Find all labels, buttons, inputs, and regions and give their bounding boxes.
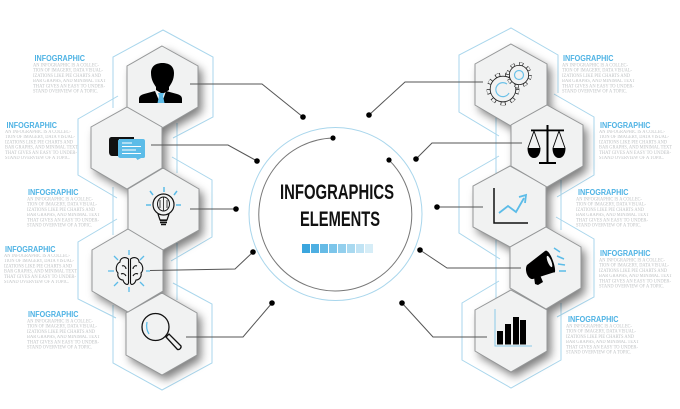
text block: right 3 xyxy=(576,188,649,228)
title xyxy=(280,181,394,231)
text block: left 3: TION OF IMAGERY, DATA VISUAL- xyxy=(27,203,97,208)
text block: left 4: AN INFOGRAPHIC IS A COLLEC- xyxy=(4,254,70,259)
icon: line chart xyxy=(494,188,528,223)
title: ELEMENTS xyxy=(300,208,380,231)
text block: left 3 xyxy=(27,188,100,228)
text block: right 1: BAR GRAPHS, AND MINIMAL TEXT xyxy=(562,79,635,84)
text block: right 3: THAT GIVES AN EASY TO UNDER- xyxy=(576,218,648,223)
text block: right 2: STAND OVERVIEW OF A TOPIC. xyxy=(599,156,664,161)
text block: left 1: INFOGRAPHIC xyxy=(34,54,85,63)
right hexagon 1 xyxy=(475,44,547,126)
text block: right 3: AN INFOGRAPHIC IS A COLLEC- xyxy=(576,198,642,202)
icon: brain xyxy=(108,250,150,292)
text block: right 5: AN INFOGRAPHIC IS A COLLEC- xyxy=(566,324,632,330)
icon: bar chart xyxy=(495,309,532,346)
right hexagon 2 xyxy=(511,105,583,187)
text block: left 3: STAND OVERVIEW OF A TOPIC. xyxy=(27,224,92,228)
text block: right 2: THAT GIVES AN EASY TO UNDER- xyxy=(599,151,671,156)
gradient squares xyxy=(302,244,373,253)
text block: left 3: THAT GIVES AN EASY TO UNDER- xyxy=(27,218,99,223)
icon: light bulb xyxy=(146,187,181,224)
text block: right 5: THAT GIVES AN EASY TO UNDER- xyxy=(566,345,638,350)
text block: left 5: THAT GIVES AN EASY TO UNDER- xyxy=(27,340,99,345)
text block: right 4: INFOGRAPHIC xyxy=(600,249,651,258)
text block: right 2: IZATIONS LIKE PIE CHARTS AND xyxy=(599,140,668,145)
text block: right 4: BAR GRAPHS, AND MINIMAL TEXT xyxy=(599,274,672,279)
text block: right 4: THAT GIVES AN EASY TO UNDER- xyxy=(599,279,671,284)
text block: right 3: IZATIONS LIKE PIE CHARTS AND xyxy=(576,208,645,213)
text block: left 4: INFOGRAPHIC xyxy=(5,245,56,254)
text block: right 3: BAR GRAPHS, AND MINIMAL TEXT xyxy=(576,213,649,218)
hexagon drop shadows xyxy=(95,49,587,380)
left blue hexagon outlines xyxy=(78,30,213,390)
text block: left 5: IZATIONS LIKE PIE CHARTS AND xyxy=(27,330,96,335)
right hexagon 4 xyxy=(510,227,581,309)
text block: left 1 xyxy=(33,54,106,94)
right blue hexagon outlines xyxy=(459,28,594,388)
icon: gears xyxy=(488,64,530,104)
text block: left 1: TION OF IMAGERY, DATA VISUAL- xyxy=(33,69,103,74)
text block: right 3: TION OF IMAGERY, DATA VISUAL- xyxy=(576,203,646,208)
text block: left 3: BAR GRAPHS, AND MINIMAL TEXT xyxy=(27,213,100,218)
text block: left 1: AN INFOGRAPHIC IS A COLLEC- xyxy=(33,64,99,68)
text block: right 4: IZATIONS LIKE PIE CHARTS AND xyxy=(599,269,668,274)
text block: left 4: TION OF IMAGERY, DATA VISUAL- xyxy=(4,259,74,264)
text block: right 2: INFOGRAPHIC xyxy=(600,121,651,130)
icon: megaphone xyxy=(526,248,566,285)
text block: left 3: INFOGRAPHIC xyxy=(28,188,79,197)
left hexagon 5 xyxy=(126,293,197,375)
text block: left 4: BAR GRAPHS, AND MINIMAL TEXT xyxy=(4,270,77,275)
connector lines and dots xyxy=(150,82,522,337)
text block: right 4: AN INFOGRAPHIC IS A COLLEC- xyxy=(599,258,665,264)
text block: right 1: TION OF IMAGERY, DATA VISUAL- xyxy=(562,69,632,74)
text block: left 2: STAND OVERVIEW OF A TOPIC. xyxy=(5,156,70,161)
text block: right 5: INFOGRAPHIC xyxy=(568,315,619,324)
text block: right 4: STAND OVERVIEW OF A TOPIC. xyxy=(599,284,664,290)
left hexagon 4 xyxy=(92,229,163,312)
text block: left 1: IZATIONS LIKE PIE CHARTS AND xyxy=(33,74,102,79)
text block: right 1: INFOGRAPHIC xyxy=(563,54,614,63)
text block: left 5 xyxy=(27,310,100,350)
right hexagon 3 xyxy=(473,166,546,247)
text block: left 2: THAT GIVES AN EASY TO UNDER- xyxy=(5,151,77,156)
text block: left 1: STAND OVERVIEW OF A TOPIC. xyxy=(33,90,98,94)
text block: right 2: TION OF IMAGERY, DATA VISUAL- xyxy=(599,135,669,140)
text block: right 2: BAR GRAPHS, AND MINIMAL TEXT xyxy=(599,146,672,151)
icon: businessman xyxy=(139,63,182,103)
text block: left 2: BAR GRAPHS, AND MINIMAL TEXT xyxy=(5,146,78,151)
text block: right 4 xyxy=(599,249,672,290)
text block: left 4: IZATIONS LIKE PIE CHARTS AND xyxy=(4,264,73,269)
text block: left 2 xyxy=(5,121,78,161)
text block: left 3: IZATIONS LIKE PIE CHARTS AND xyxy=(27,208,96,213)
icon: chat bubbles xyxy=(109,137,145,160)
text block: right 1: AN INFOGRAPHIC IS A COLLEC- xyxy=(562,64,628,68)
text block: left 5: AN INFOGRAPHIC IS A COLLEC- xyxy=(27,320,93,324)
text block: left 5: INFOGRAPHIC xyxy=(28,310,79,319)
text block: left 2: TION OF IMAGERY, DATA VISUAL- xyxy=(5,135,75,140)
text block: right 4: TION OF IMAGERY, DATA VISUAL- xyxy=(599,264,669,269)
left hexagon 1 xyxy=(127,46,198,128)
central circle xyxy=(249,128,422,300)
text block: right 1: THAT GIVES AN EASY TO UNDER- xyxy=(562,84,634,89)
icon: balance scale xyxy=(528,125,566,164)
text block: left 2: IZATIONS LIKE PIE CHARTS AND xyxy=(5,140,74,145)
text block: left 5: STAND OVERVIEW OF A TOPIC. xyxy=(27,346,92,350)
text block: left 5: TION OF IMAGERY, DATA VISUAL- xyxy=(27,325,97,330)
text block: right 1: IZATIONS LIKE PIE CHARTS AND xyxy=(562,74,631,79)
text block: right 2 xyxy=(599,121,672,161)
text block: right 5: STAND OVERVIEW OF A TOPIC. xyxy=(566,350,631,356)
text block: right 1: STAND OVERVIEW OF A TOPIC. xyxy=(562,90,627,94)
text block: left 4: STAND OVERVIEW OF A TOPIC. xyxy=(4,280,69,285)
icon: magnifying glass xyxy=(142,314,181,350)
text block: right 5: BAR GRAPHS, AND MINIMAL TEXT xyxy=(566,340,639,345)
left hexagon 2 xyxy=(91,107,162,189)
text block: left 4: THAT GIVES AN EASY TO UNDER- xyxy=(4,275,76,280)
text block: right 1 xyxy=(562,54,635,94)
text block: right 3: STAND OVERVIEW OF A TOPIC. xyxy=(576,224,641,228)
text block: left 1: THAT GIVES AN EASY TO UNDER- xyxy=(33,84,105,89)
text block: left 2: AN INFOGRAPHIC IS A COLLEC- xyxy=(5,130,71,135)
text block: left 3: AN INFOGRAPHIC IS A COLLEC- xyxy=(27,198,93,202)
text block: right 5 xyxy=(566,315,639,356)
text block: left 2: INFOGRAPHIC xyxy=(6,121,57,130)
text block: right 3: INFOGRAPHIC xyxy=(578,188,629,197)
title: INFOGRAPHICS xyxy=(280,181,394,204)
left hexagon 3 xyxy=(128,168,199,250)
text block: right 5: IZATIONS LIKE PIE CHARTS AND xyxy=(566,335,635,340)
text block: left 1: BAR GRAPHS, AND MINIMAL TEXT xyxy=(33,79,106,84)
text block: left 4 xyxy=(4,245,77,285)
text block: right 5: TION OF IMAGERY, DATA VISUAL- xyxy=(566,330,636,335)
text block: right 2: AN INFOGRAPHIC IS A COLLEC- xyxy=(599,130,665,135)
right hexagon 5 xyxy=(475,290,547,372)
text block: left 5: BAR GRAPHS, AND MINIMAL TEXT xyxy=(27,335,100,340)
